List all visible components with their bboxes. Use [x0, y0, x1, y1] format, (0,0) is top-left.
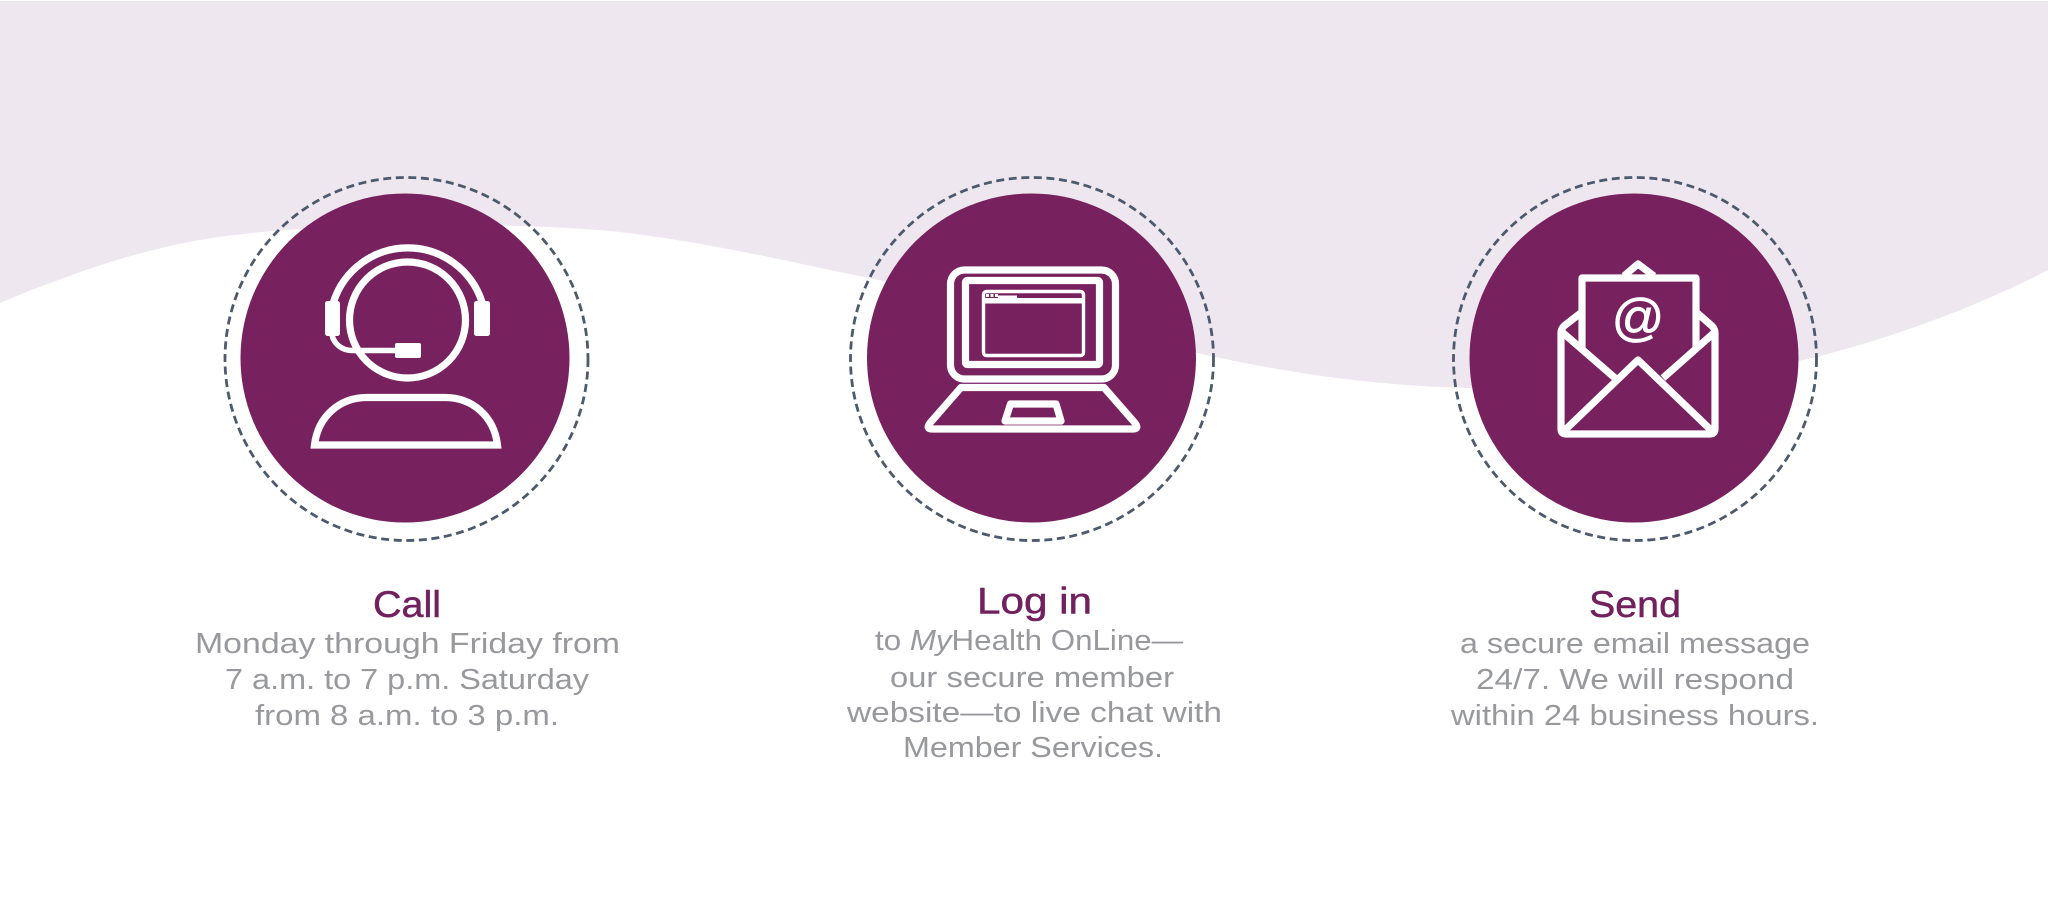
text block: log in description: Member Services.	[903, 732, 1163, 764]
purple disc: call	[240, 194, 570, 522]
background wave	[0, 1, 2048, 389]
text block: send description: 24/7. We will respond	[1476, 664, 1794, 696]
dashed ring: log in	[850, 178, 1214, 540]
text block: log in description	[846, 625, 1222, 764]
heading: log in: Log in	[977, 580, 1092, 622]
text block: send description: a secure email message	[1460, 628, 1810, 660]
purple disc: send	[1470, 194, 1798, 522]
dashed ring: send	[1454, 178, 1816, 540]
icon: open envelope: @	[1612, 289, 1664, 347]
panel: call	[195, 178, 620, 732]
heading: call: Call	[373, 584, 441, 625]
icon: headset agent	[314, 248, 498, 445]
text block: call hours: 7 a.m. to 7 p.m. Saturday	[225, 664, 590, 696]
text block: call hours: from 8 a.m. to 3 p.m.	[255, 700, 559, 732]
purple disc: log in	[867, 194, 1196, 522]
text block: log in description: website—to live chat with	[846, 697, 1222, 729]
text block: call hours	[195, 628, 620, 732]
dashed ring: call	[225, 178, 588, 540]
panel: log in	[846, 178, 1222, 764]
icon: open envelope	[1561, 264, 1715, 434]
panel: send	[1450, 178, 1819, 732]
text block: call hours: Monday through Friday from	[195, 628, 620, 660]
icon: laptop	[928, 270, 1137, 429]
text block: log in description: to MyHealth OnLine—	[875, 625, 1183, 657]
text block: send description: within 24 business hours.	[1450, 700, 1819, 732]
heading: send: Send	[1589, 584, 1681, 625]
text block: log in description: our secure member	[890, 662, 1174, 694]
text block: send description	[1450, 628, 1819, 732]
